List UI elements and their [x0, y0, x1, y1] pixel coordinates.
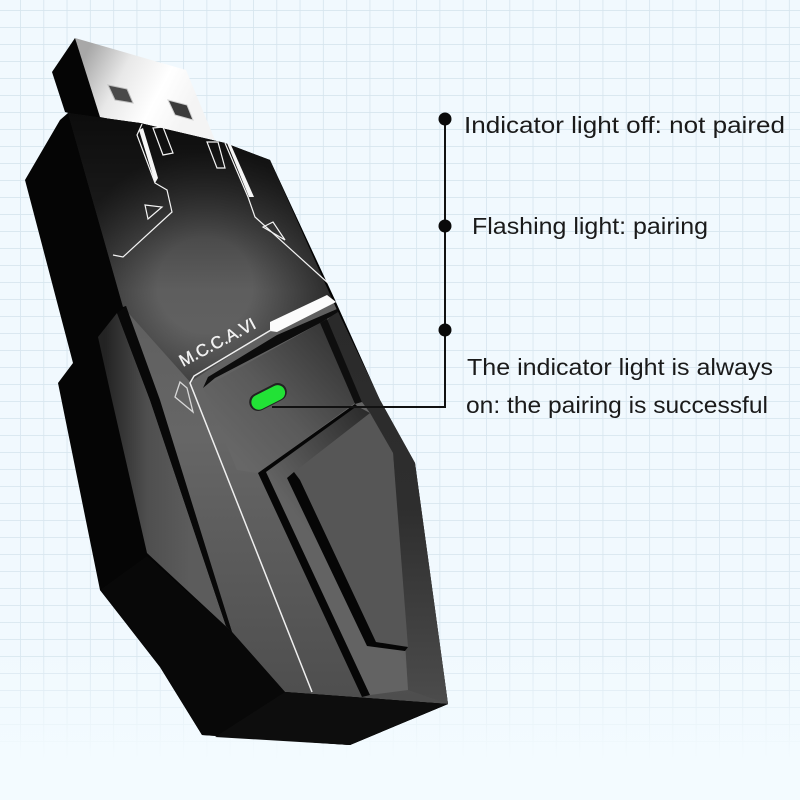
label: light off: Indicator light off: not paired	[464, 112, 785, 138]
upper white trim lines	[113, 124, 328, 412]
white panel outline	[190, 330, 312, 692]
callout connector line	[272, 112, 452, 407]
label: flashing: Flashing light: pairing	[472, 213, 708, 239]
brand name: M.C.C.A.VI	[176, 314, 259, 371]
USB adapter device	[25, 38, 448, 745]
green LED indicator	[246, 380, 290, 414]
left groove	[117, 306, 232, 632]
front lower facets	[100, 556, 448, 745]
window recess	[203, 309, 362, 473]
dot: light off	[438, 112, 452, 126]
upper face shading	[68, 113, 336, 382]
label: always on, line 1: The indicator light is always	[467, 354, 773, 380]
USB plug	[52, 38, 215, 140]
label: always on, line 2: on: the pairing is successful	[466, 392, 768, 418]
inset panel	[258, 404, 408, 697]
white band	[270, 295, 336, 332]
right bevel	[327, 310, 448, 704]
dot: flashing	[438, 220, 452, 232]
dot: always on	[438, 324, 452, 336]
adapter body silhouette	[25, 113, 448, 745]
lower left face	[98, 313, 232, 632]
main face	[68, 113, 448, 704]
